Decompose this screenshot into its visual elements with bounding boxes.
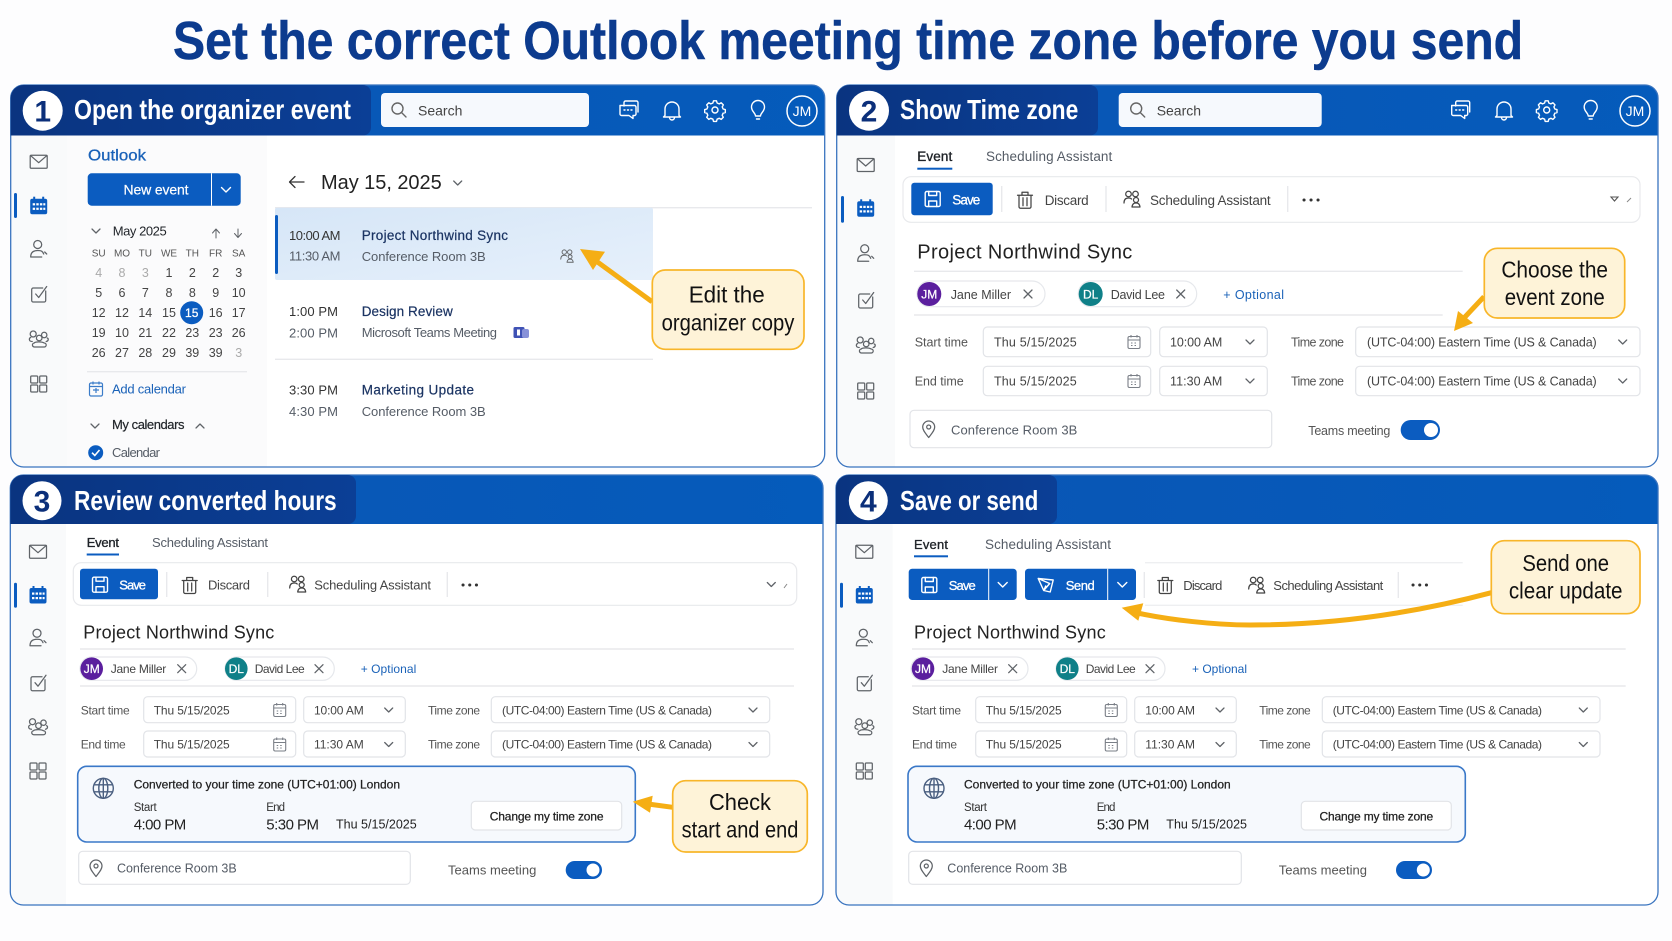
start and end fields: (UTC-04:00) Eastern Time (US & Canada) xyxy=(1367,336,1597,350)
selected event: Project Northwind Sync: 11:30 AM xyxy=(289,249,340,264)
attendees xyxy=(917,281,1284,307)
start and end fields: 11:30 AM xyxy=(314,738,364,752)
step heading: Show Time zone xyxy=(900,94,1078,125)
mini calendar: 15 xyxy=(185,306,199,320)
attendees: DL xyxy=(1060,662,1075,676)
mini calendar: TH xyxy=(186,249,199,260)
mini calendar: 39 xyxy=(209,346,223,360)
mini calendar: 29 xyxy=(162,346,176,360)
location: Conference Room 3B xyxy=(947,862,1067,876)
attendees: JM xyxy=(915,662,931,676)
mini calendar xyxy=(92,224,246,360)
mini calendar: 15 xyxy=(162,306,176,320)
search box: Search xyxy=(1157,103,1201,119)
mini calendar: 8 xyxy=(166,286,173,300)
callout: Send one xyxy=(1522,550,1609,576)
event: Design Review xyxy=(289,304,529,340)
tabs xyxy=(917,149,1113,170)
mini calendar: 22 xyxy=(162,326,176,340)
toolbar: Scheduling Assistant xyxy=(1150,193,1271,208)
mini calendar: 8 xyxy=(189,286,196,300)
attendees: DL xyxy=(1083,288,1099,302)
start and end fields: (UTC-04:00) Eastern Time (US & Canada) xyxy=(1333,738,1542,752)
mini calendar: 21 xyxy=(138,326,152,340)
left navigation rail xyxy=(14,545,48,779)
attendees: + Optional xyxy=(1223,288,1284,302)
new event button: New event xyxy=(124,182,189,198)
toolbar: Discard xyxy=(1045,193,1089,208)
mini calendar: 9 xyxy=(212,286,219,300)
start and end fields: 10:00 AM xyxy=(314,704,364,718)
search box: Search xyxy=(418,103,462,119)
location xyxy=(909,851,1241,884)
mini calendar: 6 xyxy=(119,286,126,300)
event: Marketing Update xyxy=(289,382,486,419)
mini calendar: 5 xyxy=(95,286,102,300)
converted time box: End xyxy=(1097,802,1115,814)
start and end fields: Time zone xyxy=(1259,703,1311,717)
start and end fields: End time xyxy=(81,738,126,752)
selected event: Project Northwind Sync: Project Northwind Sync xyxy=(362,228,508,243)
my calendars list: My calendars xyxy=(112,417,185,432)
toolbar: Scheduling Assistant xyxy=(314,578,431,592)
mini calendar: 7 xyxy=(142,286,149,300)
start and end fields: 10:00 AM xyxy=(1145,704,1195,718)
converted time box: Start xyxy=(964,802,988,814)
start and end fields: Thu 5/15/2025 xyxy=(154,738,230,752)
search box xyxy=(1119,93,1322,127)
selected event: Project Northwind Sync: Conference Room 3B xyxy=(362,249,486,264)
mini calendar: 26 xyxy=(232,326,246,340)
left navigation rail xyxy=(841,158,875,399)
left navigation rail xyxy=(840,545,874,779)
start and end fields: Thu 5/15/2025 xyxy=(154,704,230,718)
top bar icons: JM xyxy=(793,103,811,119)
search box xyxy=(381,93,589,127)
step heading: Save or send xyxy=(900,485,1038,516)
converted time box: 4:00 PM xyxy=(964,817,1017,834)
location: Conference Room 3B xyxy=(117,862,237,876)
mini calendar: 39 xyxy=(185,346,199,360)
toolbar: Discard xyxy=(208,578,250,592)
converted time box: Change my time zone xyxy=(1320,810,1434,824)
callout: Edit the xyxy=(689,281,765,307)
title: Set the correct Outlook meeting time zone before you send xyxy=(173,11,1523,71)
converted time box: 5:30 PM xyxy=(1097,817,1149,834)
start and end fields: Time zone xyxy=(1291,375,1344,389)
start and end fields xyxy=(81,697,770,757)
converted time box: 4:00 PM xyxy=(134,817,186,834)
start and end fields: (UTC-04:00) Eastern Time (US & Canada) xyxy=(502,738,712,752)
start and end fields: End time xyxy=(915,375,964,389)
converted time box: 5:30 PM xyxy=(266,817,319,834)
panel: step 2 show time zone xyxy=(837,85,1658,467)
tabs: Scheduling Assistant xyxy=(985,537,1111,552)
teams toggle: Teams meeting xyxy=(1308,424,1390,438)
mini calendar: 14 xyxy=(138,306,152,320)
save split button: Save xyxy=(949,578,976,593)
tabs: Event xyxy=(917,149,953,164)
mini calendar: 3 xyxy=(235,266,242,280)
step heading: 4 xyxy=(860,486,877,518)
step heading: 1 xyxy=(34,96,51,128)
start and end fields: Thu 5/15/2025 xyxy=(986,704,1062,718)
callout: organizer copy xyxy=(662,310,795,336)
new event button xyxy=(88,173,241,206)
Outlook label: Outlook xyxy=(88,148,146,165)
tabs: Scheduling Assistant xyxy=(986,149,1113,164)
my calendars list xyxy=(88,417,204,460)
callout xyxy=(673,781,807,852)
toolbar xyxy=(73,563,797,605)
start and end fields: Time zone xyxy=(1259,738,1311,752)
arrow xyxy=(1122,593,1491,625)
converted time box: Start xyxy=(134,802,157,814)
callout: Choose the xyxy=(1501,256,1608,282)
add calendar link: Add calendar xyxy=(112,381,187,396)
mini calendar: SU xyxy=(92,249,106,260)
event: Design Review: Microsoft Teams Meeting xyxy=(362,325,497,340)
start and end fields: Time zone xyxy=(428,738,480,752)
mini calendar: 2 xyxy=(189,266,196,280)
mini calendar: 8 xyxy=(119,266,126,280)
step heading: Open the organizer event xyxy=(74,94,351,125)
toolbar: Discard xyxy=(1183,578,1222,593)
attendees: DL xyxy=(229,662,244,676)
step heading: Review converted hours xyxy=(74,485,337,516)
event title: Project Northwind Sync xyxy=(83,622,274,642)
attendees: David Lee xyxy=(1086,662,1136,676)
start and end fields: 11:30 AM xyxy=(1170,375,1222,389)
event: Marketing Update: 3:30 PM xyxy=(289,382,338,397)
toolbar: Save xyxy=(952,193,980,208)
callout xyxy=(1484,248,1625,318)
event title: Project Northwind Sync xyxy=(917,241,1132,263)
callout: clear update xyxy=(1509,577,1623,603)
teams toggle xyxy=(448,861,602,879)
start and end fields: Time zone xyxy=(428,703,480,717)
attendees xyxy=(911,657,1247,680)
start and end fields: Start time xyxy=(912,703,961,717)
converted time box: Converted to your time zone (UTC+01:00) London xyxy=(964,777,1231,791)
event: Design Review: Design Review xyxy=(362,304,453,319)
my calendars list: Calendar xyxy=(112,445,161,460)
mini calendar: MO xyxy=(114,249,130,260)
mini calendar: 27 xyxy=(115,346,129,360)
event title: Project Northwind Sync xyxy=(914,622,1106,642)
attendees: Jane Miller xyxy=(951,288,1011,302)
mini calendar: FR xyxy=(209,249,222,260)
mini calendar: May 2025 xyxy=(113,224,167,239)
arrow xyxy=(580,249,652,302)
location xyxy=(79,851,410,884)
mini calendar: 1 xyxy=(166,266,173,280)
event: Marketing Update: 4:30 PM xyxy=(289,404,338,419)
event: Marketing Update: Marketing Update xyxy=(362,382,474,397)
mini calendar: 2 xyxy=(212,266,219,280)
step heading xyxy=(11,85,371,136)
event: Design Review: 1:00 PM xyxy=(289,304,338,319)
send split button xyxy=(1025,569,1136,600)
attendees: JM xyxy=(84,662,100,676)
start and end fields xyxy=(915,327,1640,396)
step heading xyxy=(836,475,1057,524)
toolbar xyxy=(903,177,1640,222)
toolbar xyxy=(909,563,1463,605)
top bar icons: JM xyxy=(1626,103,1644,119)
callout: start and end xyxy=(682,816,798,842)
mini calendar: 10 xyxy=(115,326,129,340)
teams toggle: Teams meeting xyxy=(448,862,536,877)
toolbar: Save xyxy=(119,577,146,592)
converted time box xyxy=(78,766,635,842)
callout: Check xyxy=(709,789,771,815)
teams toggle xyxy=(1279,861,1432,879)
date header: May 15, 2025 xyxy=(321,172,442,194)
start and end fields: (UTC-04:00) Eastern Time (US & Canada) xyxy=(1333,704,1542,718)
start and end fields: Thu 5/15/2025 xyxy=(994,336,1077,350)
converted time box xyxy=(908,766,1465,842)
attendees xyxy=(80,657,416,680)
attendees: Jane Miller xyxy=(111,662,166,676)
left navigation rail xyxy=(14,155,48,392)
teams toggle xyxy=(1308,420,1440,440)
location: Conference Room 3B xyxy=(951,423,1077,438)
top bar icons xyxy=(1452,96,1650,126)
start and end fields: Thu 5/15/2025 xyxy=(986,738,1062,752)
mini calendar: 12 xyxy=(92,306,106,320)
location xyxy=(910,410,1272,448)
start and end fields: End time xyxy=(912,738,957,752)
selected event: Project Northwind Sync xyxy=(275,208,653,280)
mini calendar: TU xyxy=(139,249,152,260)
mini calendar: 23 xyxy=(209,326,223,340)
attendees: David Lee xyxy=(1111,288,1165,302)
mini calendar: 10 xyxy=(232,286,246,300)
converted time box: End xyxy=(266,802,285,814)
mini calendar: 4 xyxy=(95,266,102,280)
arrow xyxy=(1454,297,1484,331)
toolbar: Scheduling Assistant xyxy=(1273,578,1384,593)
mini calendar: SA xyxy=(232,249,246,260)
attendees: + Optional xyxy=(1192,662,1247,676)
tabs: Event xyxy=(87,535,119,550)
step heading xyxy=(837,85,1098,136)
attendees: Jane Miller xyxy=(942,662,998,676)
save split button xyxy=(909,569,1017,600)
mini calendar: 17 xyxy=(232,306,246,320)
mini calendar: 26 xyxy=(92,346,106,360)
attendees: David Lee xyxy=(255,662,305,676)
converted time box: Thu 5/15/2025 xyxy=(1166,817,1247,831)
start and end fields: (UTC-04:00) Eastern Time (US & Canada) xyxy=(1367,375,1597,389)
start and end fields: Thu 5/15/2025 xyxy=(994,375,1077,389)
tabs: Scheduling Assistant xyxy=(152,535,268,550)
selected event: Project Northwind Sync: 10:00 AM xyxy=(289,228,340,243)
converted time box: Change my time zone xyxy=(490,810,604,824)
event: Design Review: 2:00 PM xyxy=(289,325,338,340)
step heading xyxy=(10,475,356,524)
start and end fields xyxy=(912,697,1600,757)
callout: event zone xyxy=(1505,284,1605,310)
attendees: + Optional xyxy=(361,662,416,676)
icon: Teams xyxy=(514,327,529,338)
teams toggle: Teams meeting xyxy=(1279,862,1367,877)
event: Marketing Update: Conference Room 3B xyxy=(362,404,486,419)
mini calendar: 12 xyxy=(115,306,129,320)
top bar icons xyxy=(620,96,817,126)
tabs xyxy=(914,537,1111,557)
start and end fields: Start time xyxy=(81,703,130,717)
arrow xyxy=(633,796,673,813)
panel: step 4 save or send xyxy=(836,475,1658,905)
tabs: Event xyxy=(914,537,948,552)
converted time box: Converted to your time zone (UTC+01:00) London xyxy=(134,777,400,791)
panel: step 1 open the organizer event xyxy=(11,85,825,467)
panel: step 3 review converted hours xyxy=(10,475,823,905)
callout xyxy=(1491,541,1640,614)
mini calendar: 28 xyxy=(138,346,152,360)
mini calendar: 16 xyxy=(209,306,223,320)
mini calendar: 3 xyxy=(142,266,149,280)
converted time box: Thu 5/15/2025 xyxy=(336,817,417,831)
start and end fields: Start time xyxy=(915,335,968,349)
mini calendar: 23 xyxy=(185,326,199,340)
start and end fields: 10:00 AM xyxy=(1170,336,1222,350)
send split button: Send xyxy=(1066,578,1095,593)
step heading: 2 xyxy=(861,96,877,128)
mini calendar: 3 xyxy=(235,346,242,360)
start and end fields: 11:30 AM xyxy=(1145,738,1195,752)
start and end fields: Time zone xyxy=(1291,335,1344,349)
tabs xyxy=(87,535,268,556)
attendees: JM xyxy=(921,288,937,302)
mini calendar: 19 xyxy=(92,326,106,340)
callout xyxy=(652,270,804,349)
mini calendar: WE xyxy=(161,249,177,260)
step heading: 3 xyxy=(34,486,50,518)
start and end fields: (UTC-04:00) Eastern Time (US & Canada) xyxy=(502,704,712,718)
